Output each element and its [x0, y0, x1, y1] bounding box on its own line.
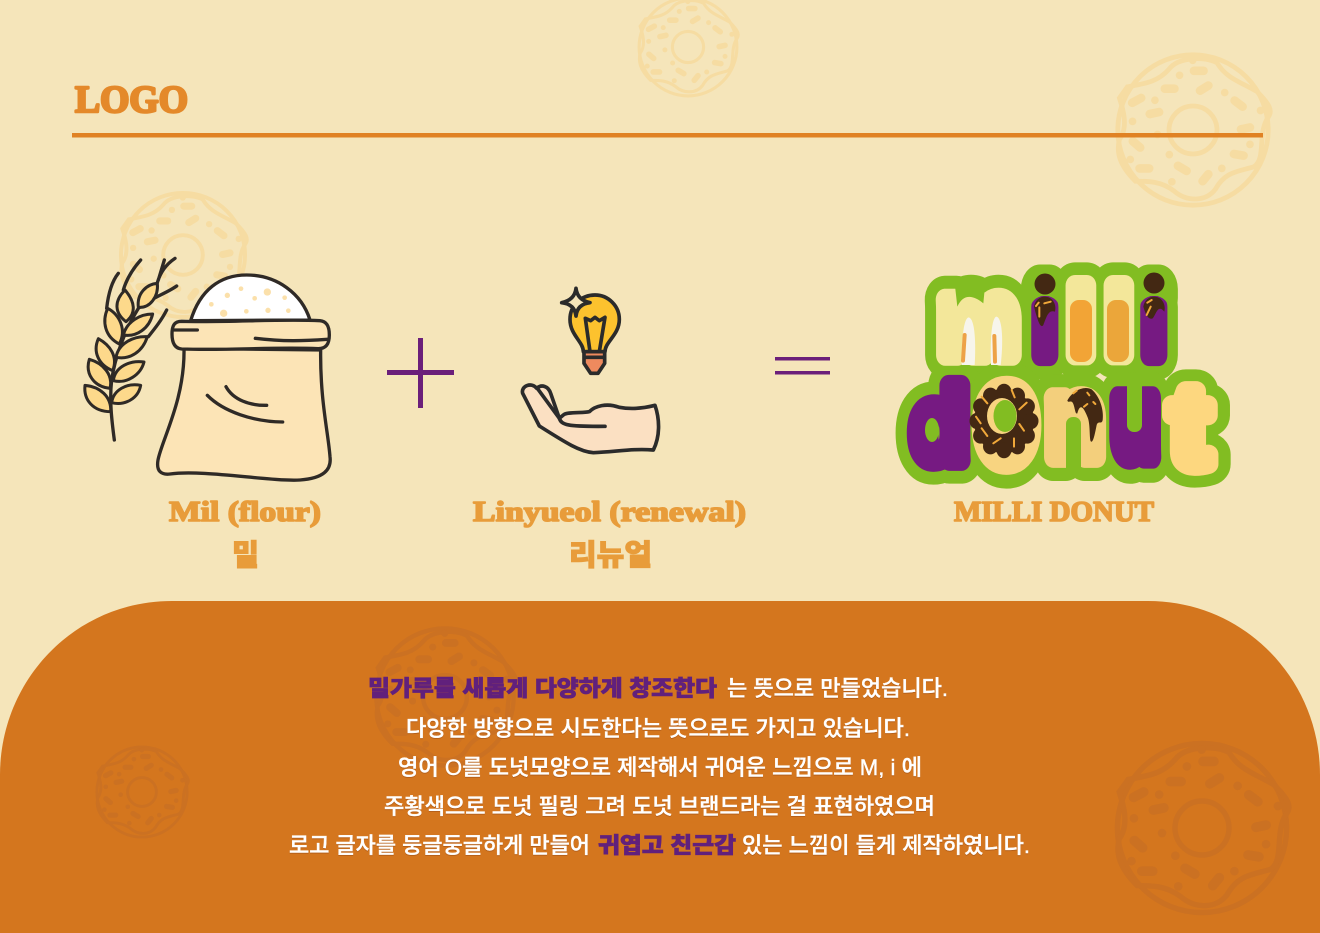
- label: 밀: 밀: [232, 539, 259, 572]
- logo: word milli: [936, 275, 1168, 366]
- logo: word milli: m: [939, 260, 1018, 378]
- icon: light bulb: [562, 288, 619, 373]
- decorative donut: panel centre-left: [376, 628, 516, 766]
- text: line 2: 다양한 방향으로 시도한다는 뜻으로도 가지고 있습니다.: [406, 716, 910, 741]
- logo: word donut: u: [1112, 357, 1158, 482]
- logo: green outline layer: d: [912, 367, 967, 482]
- logo: word milli: l: [1107, 270, 1131, 376]
- decorative donut: panel left: [97, 747, 188, 837]
- text: line 1: 밀가루를 새롭게 다양하게 창조한다: [368, 676, 717, 701]
- logo: green outline layer: m: [939, 260, 1018, 378]
- text: line 5: 있는 느낌이 들게 제작하였니다.: [742, 833, 1030, 858]
- icon: light bulb over hand: [522, 288, 659, 453]
- panel: description: [0, 601, 1320, 933]
- logo: word donut: t: [1171, 364, 1210, 490]
- logo: word donut: n: [1047, 357, 1103, 481]
- logo: green outline layer: i: [1035, 274, 1055, 375]
- logo: green outline layer: l: [1107, 270, 1131, 376]
- logo: filling and chocolate details: [925, 272, 1165, 477]
- icon: equals sign: [775, 357, 830, 374]
- icon: flour dome: [191, 275, 310, 321]
- text: line 1: 는 뜻으로 만들었습니다.: [727, 676, 948, 701]
- logo: word milli: i: [1035, 274, 1055, 375]
- logo: green outline layer: u: [1112, 357, 1158, 482]
- logo: green outline layer: [912, 260, 1210, 492]
- logo: green outline layer: l: [1069, 270, 1093, 376]
- decorative donut: top centre: [639, 0, 738, 96]
- logo: word donut: d: [912, 367, 967, 482]
- logo: word milli: i: [1144, 274, 1164, 375]
- text: line 4: 주황색으로 도넛 필링 그려 도넛 브랜드라는 걸 표현하였으며: [384, 794, 935, 819]
- label: Linyueol (renewal): Linyueol (renewal): [473, 497, 746, 528]
- text: line 1: [368, 676, 948, 701]
- label: MILLI DONUT: MILLI DONUT: [954, 497, 1154, 528]
- label: 리뉴얼: 리뉴얼: [569, 539, 652, 572]
- text: line 5: 귀엽고 친근감: [598, 833, 736, 858]
- text: line 5: [289, 833, 1030, 858]
- logo: green outline layer: o: [976, 336, 1037, 492]
- logo: word donut: [912, 336, 1210, 492]
- decorative donut: behind wheat: [121, 193, 247, 317]
- icon: wheat and flour sack: [85, 258, 330, 480]
- logo: word milli: l: [1069, 270, 1093, 376]
- icon: plus sign: [387, 338, 454, 408]
- decorative donut: top right: [1118, 55, 1270, 205]
- heading rule: [72, 133, 1263, 138]
- logo: milli donut: [912, 260, 1210, 492]
- icon: hand: [522, 385, 659, 453]
- icon: sack: [158, 320, 330, 480]
- label: Mil (flour): Mil (flour): [169, 497, 321, 528]
- logo: green outline layer: i: [1144, 274, 1164, 375]
- logo: word donut: o: [976, 336, 1037, 492]
- text: line 3: 영어 O를 도넛모양으로 제작해서 귀여운 느낌으로 M, i 에: [398, 755, 922, 780]
- heading: LOGO: LOGO: [75, 79, 188, 121]
- icon: wheat: [85, 258, 177, 440]
- text: line 5: 로고 글자를 둥글둥글하게 만들어: [289, 833, 590, 858]
- decorative donut: panel right: [1117, 743, 1289, 913]
- logo: green outline layer: n: [1047, 357, 1103, 481]
- logo: green outline layer: t: [1171, 364, 1210, 490]
